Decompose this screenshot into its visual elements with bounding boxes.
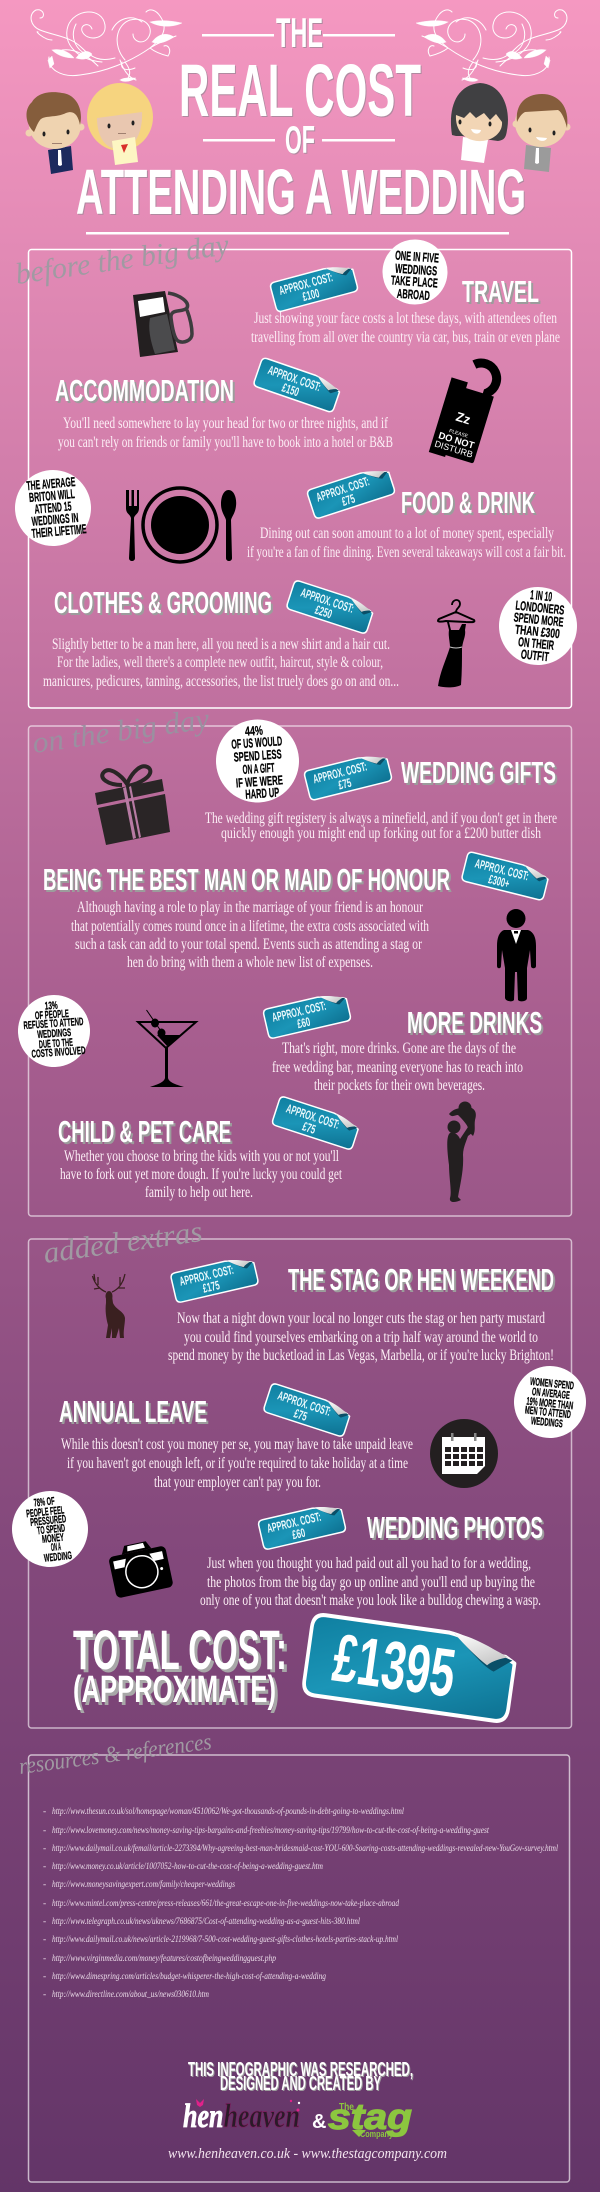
panel: added extras <box>8 1215 590 1728</box>
stat bubble: average Briton: ATTEND 15 <box>34 498 72 517</box>
text: more drinks <box>272 1040 523 1094</box>
text: best man: such a task can add to your total spend. Events such as attending a stag or <box>75 936 422 953</box>
stat bubble: 78 percent: MONEY <box>41 1532 65 1546</box>
stat bubble: average Briton: BRITON WILL <box>28 486 76 505</box>
credits text: THIS INFOGRAPHIC WAS RESEARCHED, <box>188 2059 413 2081</box>
cost tag: food £75 <box>306 465 396 519</box>
ampersand: & <box>312 2111 326 2133</box>
cost tag: food £75: APPROX. COST: <box>314 474 371 505</box>
cost tag: gifts £75 <box>304 751 392 801</box>
text: accommodation: You'll need somewhere to lay your head for two or three nights, and if <box>63 415 388 432</box>
stat bubble: 1 in 10 Londoners <box>495 583 581 669</box>
text: annual leave: that your employer can't pay you for. <box>154 1474 321 1491</box>
cost tag: food £75: £75 <box>340 492 357 509</box>
stat bubble: 13 percent <box>16 993 92 1069</box>
stat bubble: 44 percent: IF WE WERE <box>235 772 284 791</box>
total cost heading: TOTAL COST: <box>73 1618 287 1681</box>
text: more drinks: their pockets for their own beverages. <box>314 1077 485 1094</box>
icon: camera <box>107 1538 174 1599</box>
stat bubble: 13 percent: COSTS INVOLVED <box>31 1045 86 1061</box>
stat bubble: 44 percent <box>213 717 302 805</box>
text: child and pet care <box>60 1148 342 1201</box>
stat bubble: 13 percent: WEDDINGS <box>37 1027 72 1041</box>
stat bubble: 1 in 10 Londoners: 1 IN 10 <box>529 587 553 604</box>
stat bubble: 78 percent: PEOPLE FEEL <box>26 1504 65 1520</box>
stat bubble: 1 in 10 Londoners: LONDONERS <box>515 598 565 618</box>
cost tag: clothes £250: APPROX. COST: <box>299 586 356 616</box>
heading: accommodation: ACCOMMODATION <box>55 373 234 408</box>
stat bubble: one in five: TAKE PLACE <box>390 272 438 291</box>
stat bubble: 44 percent: OF US WOULD <box>231 733 283 752</box>
cost tag: wedding photos £60: £60 <box>291 1526 307 1542</box>
section label: added extras: added extras <box>41 1215 204 1270</box>
cost tag: gifts £75: APPROX. COST: <box>312 759 368 786</box>
decorative swirl left <box>31 10 182 81</box>
icon: calendar <box>430 1419 498 1488</box>
text: travel <box>251 310 560 346</box>
cost tag: more drinks £60: £60 <box>296 1015 312 1031</box>
panel: resources and references <box>17 1729 570 2182</box>
reference list: - <box>43 1954 46 1964</box>
reference list: - <box>43 1862 46 1872</box>
stat bubble: 13 percent: OF PEOPLE <box>35 1008 69 1022</box>
stat bubble: 44 percent: ON A GIFT <box>242 760 275 777</box>
icon: do not disturb door hanger: Zz <box>454 409 473 428</box>
cost tag: more drinks £60: APPROX. COST: <box>271 999 327 1025</box>
reference list: - <box>43 1972 46 1982</box>
stat bubble: one in five: WEDDINGS <box>395 261 438 279</box>
text: best man: hen do bring with them a whole new list of expenses. <box>127 954 373 971</box>
text: accommodation: you can't rely on friends or family you'll have to book into a hotel or B&B <box>58 434 393 451</box>
stat bubble: 1 in 10 Londoners: OUTFIT <box>520 646 550 664</box>
cost tag: child and pet care £75: APPROX. COST: <box>284 1102 341 1132</box>
text: annual leave: While this doesn't cost you money per se, you may have to take unpaid leave <box>61 1436 413 1453</box>
cost tag: child and pet care £75 <box>271 1096 361 1150</box>
reference list: - <box>43 1990 46 2000</box>
cost tag: travel £100 <box>270 262 358 312</box>
cost tag: stag weekend £175 <box>170 1255 259 1303</box>
icon: do not disturb door hanger: DISTURB <box>433 439 474 460</box>
cost tag: child and pet care £75: £75 <box>301 1119 317 1137</box>
text: annual leave <box>61 1436 413 1491</box>
reference list: http://www.lovemoney.com/news/money-saving-tips-bargains-and-freebies/money-saving-tips/19799/how-to-cut-the-cost-of-being-a-wedding-guest <box>52 1825 489 1836</box>
cost tag: best man £300+: £300+ <box>487 872 511 891</box>
cost tag: stag weekend £175: £175 <box>201 1278 221 1296</box>
reference list: http://www.moneysavingexpert.com/family/cheaper-weddings <box>52 1879 235 1890</box>
stat bubble: average Briton <box>12 467 94 549</box>
cost tag: more drinks £60 <box>263 991 351 1039</box>
icon: man in suit <box>497 909 536 1001</box>
text: best man: Although having a role to play in the marriage of your friend is an honour <box>77 899 423 916</box>
heading: travel: TRAVEL <box>462 274 539 309</box>
icon: parent lifting child silhouette <box>447 1102 476 1202</box>
logo: the stag company: The <box>339 2102 354 2113</box>
cost tag: annual leave £75 <box>263 1383 352 1437</box>
decorative swirl right <box>416 10 567 81</box>
stat bubble: average Briton: WEDDINGS IN <box>31 510 79 529</box>
cost tag: clothes £250 <box>286 580 375 634</box>
stat bubble: 44 percent: 44% <box>244 723 264 739</box>
title word: OF: OF <box>285 119 315 162</box>
cost tag: travel £100: APPROX. COST: <box>278 270 334 298</box>
icon: do not disturb door hanger <box>429 355 502 465</box>
icon: stag silhouette <box>92 1274 125 1338</box>
reference list: http://www.dailymail.co.uk/news/article-2119968/7-500-cost-wedding-guest-gifts-clothes-hotels-parties-stack-up.html <box>52 1934 398 1945</box>
text: child and pet care: have to fork out yet more dough. If you're lucky you could get <box>60 1166 342 1183</box>
cost tag: clothes £250: £250 <box>313 603 334 621</box>
character: blonde woman <box>87 83 153 165</box>
heading: clothes and grooming: CLOTHES & GROOMING <box>54 585 272 620</box>
stat bubble: 78 percent: ON A <box>50 1541 62 1554</box>
reference list: http://www.dimespring.com/articles/budget-whisperer-the-high-cost-of-attending-a-wedding <box>52 1971 326 1982</box>
logo: hen heaven: henheaven <box>183 2098 300 2135</box>
panel: before the big day <box>12 228 581 708</box>
text: stag or hen weekend <box>168 1310 554 1364</box>
character: boy in grey suit <box>512 94 570 172</box>
header: title and characters <box>26 9 570 234</box>
text: annual leave: if you haven't got enough left, or if you're required to take holiday at a time <box>67 1455 408 1472</box>
logo: the stag company: Company <box>360 2129 393 2139</box>
stat bubble: 1 in 10 Londoners: THAN £300 <box>514 622 561 641</box>
text: clothes and grooming: Slightly better to be a man here, all you need is a new shirt and a hair cut. <box>52 636 390 653</box>
cost tag: wedding photos £60: APPROX. COST: <box>266 1510 322 1536</box>
text: clothes and grooming: manicures, pedicures, tanning, accessories, the list truely does go on and on... <box>43 673 399 690</box>
reference list: http://www.telegraph.co.uk/news/uknews/7686875/Cost-of-attending-wedding-as-a-guest-hits-380.html <box>52 1916 360 1927</box>
reference list: http://www.virginmedia.com/money/features/costofbeingweddingguest.php <box>52 1953 276 1964</box>
section label: on the big day: on the big day <box>30 702 212 760</box>
stat bubble: women spend more <box>510 1362 590 1442</box>
website addresses: www.henheaven.co.uk - www.thestagcompany.com <box>168 2146 447 2162</box>
stat bubble: 78 percent: TO SPEND <box>37 1522 66 1537</box>
cost tag: annual leave £75: £75 <box>292 1406 309 1424</box>
text: wedding gifts <box>205 810 557 842</box>
text: food and drink <box>247 525 566 561</box>
stat bubble: one in five: ONE IN FIVE <box>395 248 440 266</box>
text: clothes and grooming <box>43 636 399 690</box>
reference list: - <box>43 1826 46 1836</box>
stat bubble: 44 percent: SPEND LESS <box>233 746 282 765</box>
icon: do not disturb door hanger: DO NOT <box>437 430 476 452</box>
heading: annual leave: ANNUAL LEAVE <box>59 1394 207 1429</box>
reference list: - <box>43 1807 46 1817</box>
panel: on the big day <box>16 702 571 1216</box>
big cost tag: £1395: £1395 <box>328 1620 460 1712</box>
text: best man: that potentially comes round once in a lifetime, the extra costs associated with <box>71 918 429 935</box>
reference list: http://www.money.co.uk/article/1007052-how-to-cut-the-cost-of-being-a-wedding-guest.htm <box>52 1861 323 1872</box>
cost tag: gifts £75: £75 <box>337 776 353 792</box>
cost tag: annual leave £75: APPROX. COST: <box>276 1389 333 1419</box>
reference list: http://www.mintel.com/press-centre/press-releases/661/the-great-escape-one-in-five-weddings-now-take-place-abroad <box>52 1898 399 1909</box>
cost tag: best man £300+: APPROX. COST: <box>473 856 530 883</box>
stat bubble: average Briton: THEIR LIFETIME <box>31 521 87 541</box>
cost tag: accommodation £150 <box>253 357 342 413</box>
text: child and pet care: family to help out here. <box>145 1184 253 1201</box>
stat bubble: 13 percent: REFUSE TO ATTEND <box>23 1016 84 1032</box>
section label: before the big day: before the big day <box>13 228 232 291</box>
reference list: http://www.directline.com/about_us/news030610.htm <box>52 1990 209 2000</box>
cost tag: accommodation £150: APPROX. COST: <box>266 363 323 394</box>
text: best man <box>71 899 429 971</box>
text: more drinks: That's right, more drinks. Gone are the days of the <box>282 1040 516 1057</box>
total cost heading <box>73 1618 287 1711</box>
icon: fuel pump <box>133 291 192 357</box>
text: accommodation <box>58 415 393 451</box>
text: wedding photos <box>200 1555 541 1609</box>
stat bubble: 78 percent: WEDDING <box>43 1550 73 1565</box>
logo: the stag company: stag <box>328 2096 412 2137</box>
reference list: - <box>43 1899 46 1909</box>
stat bubble: 13 percent: 13% <box>44 1000 58 1013</box>
cost tag: accommodation £150: £150 <box>280 381 301 399</box>
cost tag: stag weekend £175: APPROX. COST: <box>178 1263 235 1289</box>
title: REAL COST: REAL COST <box>179 49 421 132</box>
stat bubble: 13 percent: DUE TO THE <box>39 1037 73 1051</box>
icon: do not disturb door hanger: PLEASE <box>448 428 469 440</box>
icon: gift box <box>95 766 170 845</box>
reference list: - <box>43 1844 46 1854</box>
stat bubble: 78 percent: 78% OF <box>33 1495 55 1510</box>
character: boy in navy suit <box>26 92 84 174</box>
stat bubble: one in five <box>380 237 450 307</box>
stat bubble: 1 in 10 Londoners: ON THEIR <box>517 634 555 653</box>
reference list: - <box>43 1917 46 1927</box>
stat bubble: 1 in 10 Londoners: SPEND MORE <box>513 609 565 630</box>
character: dark haired woman <box>451 83 508 163</box>
stat bubble: 78 percent: PRESSURED <box>30 1513 67 1529</box>
stat bubble: average Briton: THE AVERAGE <box>26 474 76 493</box>
stat bubble: one in five: ABROAD <box>396 286 430 303</box>
reference list <box>43 1806 558 2000</box>
stat bubble: women spend more: WEDDINGS <box>530 1415 563 1430</box>
cost tag: wedding photos £60 <box>258 1502 346 1550</box>
reference list: - <box>43 1880 46 1890</box>
cost tag: travel £100: £100 <box>301 286 321 304</box>
icon: martini glass <box>138 1010 196 1087</box>
total cost heading: (APPROXIMATE) <box>73 1669 276 1711</box>
title underline <box>86 232 509 234</box>
title word: THE: THE <box>276 9 323 56</box>
reference list: http://www.thesun.co.uk/sol/homepage/woman/4510062/We-got-thousands-of-pounds-in-debt-going-to-weddings.html <box>52 1806 404 1817</box>
icon: black dress on hanger <box>438 600 474 687</box>
reference list: - <box>43 1935 46 1945</box>
icon: plate with cutlery <box>126 488 236 562</box>
stat bubble: 78 percent <box>8 1487 92 1571</box>
text: clothes and grooming: For the ladies, well there's a complete new outfit, haircut, style & colour, <box>57 654 383 671</box>
credits text <box>188 2059 413 2095</box>
stat bubble: 44 percent: HARD UP <box>245 785 280 802</box>
credits text: DESIGNED AND CREATED BY <box>220 2073 381 2095</box>
text: child and pet care: Whether you choose to bring the kids with you or not you'll <box>64 1148 339 1165</box>
heading: child and pet care: CHILD & PET CARE <box>58 1114 231 1149</box>
section label: resources and references: resources & references <box>17 1729 213 1779</box>
cost tag: best man £300+ <box>461 851 550 901</box>
